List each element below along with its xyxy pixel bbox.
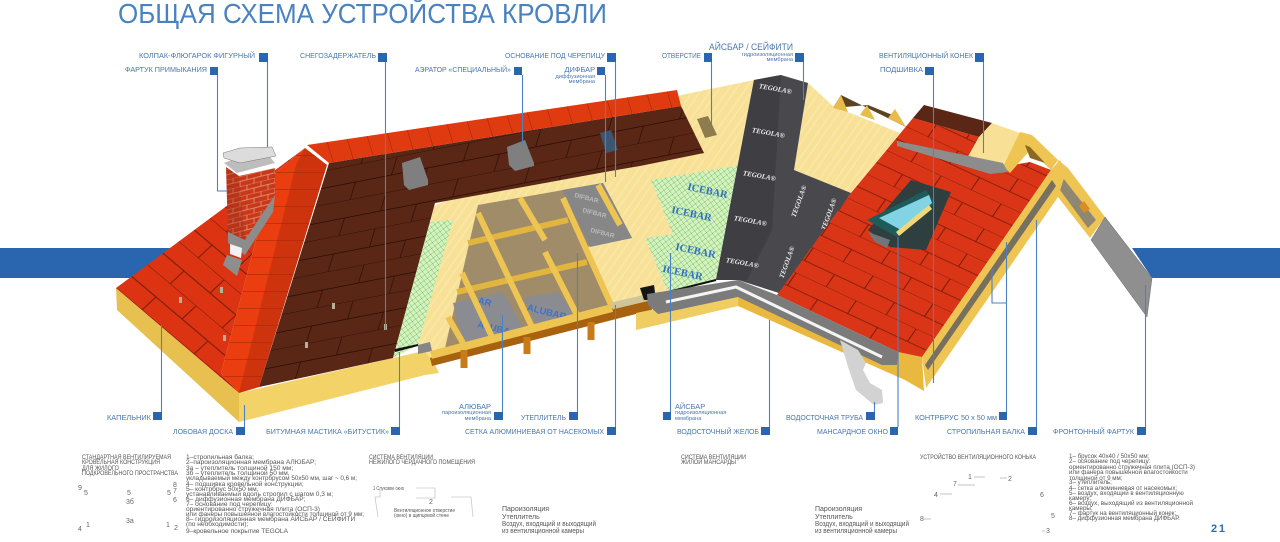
ridge diagram numbers: 5 — [1051, 513, 1055, 520]
list: ridge layers: 8– диффузионная мембрана ДИФБАР. — [1069, 515, 1180, 522]
dark membrane: TEGOLA® — [742, 169, 777, 183]
diagram numbers 1: 5 — [84, 490, 88, 497]
diagram numbers 1: 5 — [127, 490, 131, 497]
ridge diagram numbers — [920, 474, 1055, 535]
label: фронтонный фартук — [1053, 285, 1146, 436]
label: подшивка: ПОДШИВКА — [880, 65, 923, 74]
legend 2: Пароизоляция — [815, 506, 862, 513]
label: капельник: КАПЕЛЬНИК — [107, 413, 152, 422]
label: мансардное окно: МАНСАРДНОЕ ОКНО — [817, 427, 888, 436]
label: аэратор — [415, 65, 522, 145]
label: отверстие — [662, 51, 712, 127]
legend 2: Воздух, входящий и выходящий — [815, 520, 909, 528]
label: колпак — [139, 51, 268, 147]
rafter opening — [445, 183, 632, 348]
legend 1: Воздух, входящий и выходящий — [502, 520, 596, 528]
attic diagram: 2 — [429, 499, 433, 506]
diagram numbers 1: 1 — [86, 522, 90, 529]
label: стропильная балка — [947, 220, 1037, 436]
list: structure layers: 3б – утеплитель толщиной 50 мм, — [186, 469, 290, 477]
list: ridge layers: или фанера повышенной влагостойкости — [1069, 469, 1188, 476]
ridge diagram numbers: 3 — [1046, 528, 1050, 535]
label: контрбрус: КОНТРБРУС 50 x 50 мм — [915, 413, 997, 422]
label: айсбар: мембрана — [675, 416, 702, 422]
label: вентиляционный конек: ВЕНТИЛЯЦИОННЫЙ КОНЕК — [879, 51, 974, 60]
list: structure layers: укладываемый между контрбрусом 50х50 мм, шаг ~ 0,6 м; — [186, 474, 357, 482]
diagram numbers 1: 5 — [167, 490, 171, 497]
label: основание: ОСНОВАНИЕ ПОД ЧЕРЕПИЦУ — [505, 51, 605, 60]
alubar membrane: ALUBA — [476, 319, 511, 338]
list: structure layers: 6– диффузионная мембрана ДИФБАР; — [186, 495, 305, 503]
ridge diagram numbers: 1 — [968, 474, 972, 481]
label: дифбар — [556, 65, 606, 182]
label: снегозадержатель: СНЕГОЗАДЕРЖАТЕЛЬ — [300, 51, 376, 60]
red roof right — [777, 118, 1051, 357]
legend 1: Утеплитель — [502, 514, 540, 521]
difbar membrane — [562, 183, 632, 247]
difbar membrane: DIFBAR — [574, 192, 599, 205]
list: ridge layers: 3– утеплитель; — [1069, 479, 1112, 486]
frontal apron — [1091, 217, 1152, 317]
list: structure layers: устанавливаемый вдоль стропил с шагом 0,3 м; — [186, 490, 333, 498]
label: дифбар: мембрана — [569, 79, 596, 85]
blue band left — [0, 248, 180, 278]
list: structure layers: (по необходимости); — [186, 520, 248, 528]
brown ridge patch — [913, 105, 992, 137]
mesh icebar: ICEBAR — [661, 264, 704, 283]
label: алюбар: пароизоляционная — [442, 410, 491, 416]
osb near ridge — [965, 123, 1020, 163]
osb left main deck — [418, 80, 754, 357]
label: дифбар: диффузионная — [556, 74, 595, 80]
rafters — [431, 185, 650, 368]
legend 2: Утеплитель — [815, 514, 853, 521]
ridge diagram numbers: 2 — [1008, 476, 1012, 483]
legend 1: из вентиляционной камеры — [502, 527, 584, 535]
difbar membrane: DIFBAR — [582, 207, 607, 220]
lower board under gutter — [636, 292, 738, 330]
list: structure layers: 1–стропильная балка; — [186, 453, 254, 461]
attic diagram: (окно) в щипцовой стене — [394, 512, 449, 519]
dark membrane: TEGOLA® — [778, 245, 797, 279]
dark membrane — [716, 75, 851, 293]
caption: cold attic ventilation — [369, 454, 475, 466]
gable truss right — [1054, 160, 1105, 238]
small trusses — [833, 95, 906, 127]
verge — [922, 160, 1066, 388]
label: айсбар сейфити — [709, 41, 804, 100]
aerator special — [600, 130, 618, 153]
ridge diagram numbers: 4 — [934, 492, 938, 499]
legend 2: из вентиляционной камеры — [815, 527, 897, 535]
mesh left — [393, 220, 453, 358]
legend 1: Пароизоляция — [502, 506, 549, 513]
ridge diagram numbers: 7 — [953, 481, 957, 488]
label: основание — [505, 51, 616, 177]
list: ridge layers: 6– воздух, выходящий из вентиляционной — [1069, 500, 1194, 507]
list: structure layers: 4– подшивка кровельной конструкции; — [186, 480, 304, 488]
diagram numbers 1: 9 — [78, 485, 82, 492]
diagram numbers 1: 2 — [174, 525, 178, 532]
caption: attic room ventilation: ЖИЛОЙ МАНСАРДЫ — [681, 457, 736, 466]
label: контрбрус — [915, 242, 1007, 422]
roof window — [867, 180, 951, 250]
osb upper right — [794, 83, 900, 193]
caption: cold attic ventilation: СИСТЕМА ВЕНТИЛЯЦИИ — [369, 454, 433, 461]
alubar membrane: ALUBAR — [526, 302, 568, 323]
hip roof red — [116, 148, 305, 393]
mesh icebar: ICEBAR — [674, 242, 717, 261]
list: structure layers: 5– контрбрус 50х50 мм, — [186, 485, 259, 493]
caption: ridge ventilation: УСТРОЙСТВО ВЕНТИЛЯЦИОННОГО КОНЬКА — [920, 452, 1036, 461]
label: айсбар сейфити: АЙСБАР / СЕЙФИТИ — [709, 41, 793, 52]
caption: cold attic ventilation: НЕЖИЛОГО ЧЕРДАЧНОГО ПОМЕЩЕНИЯ — [369, 459, 475, 466]
label: айсбар сейфити: гидроизоляционная — [742, 52, 793, 58]
list: ridge layers: 7– фартук на вентиляционный конек; — [1069, 510, 1176, 517]
label: колпак: КОЛПАК-ФЛЮГАРОК ФИГУРНЫЙ — [139, 51, 255, 60]
dark membrane: TEGOLA® — [733, 214, 768, 228]
diagram numbers 1: 3а — [126, 518, 134, 525]
caption: attic room ventilation — [681, 454, 746, 466]
label: водосточная труба: ВОДОСТОЧНАЯ ТРУБА — [786, 413, 863, 422]
mesh icebar — [645, 165, 742, 292]
attic diagram: 1 Слуховое окно — [373, 486, 404, 492]
list: ridge layers: 4– сетка алюминиевая от насекомых; — [1069, 485, 1177, 492]
label: айсбар: гидроизоляционная — [675, 410, 726, 416]
label: фронтонный фартук: ФРОНТОННЫЙ ФАРТУК — [1053, 427, 1135, 436]
list: structure layers: 9–кровельное покрытие TEGOLA — [186, 528, 289, 535]
diagram numbers 1 — [78, 482, 178, 533]
aerator 2 — [507, 140, 534, 171]
label: утеплитель — [521, 253, 578, 422]
diagram numbers 1: 3б — [126, 498, 134, 506]
diagram numbers 1: 6 — [173, 497, 177, 504]
list: structure layers: 3а – утеплитель толщиной 150 мм; — [186, 464, 293, 472]
label: айсбар: АЙСБАР — [675, 402, 705, 411]
list: ridge layers: 5– воздух, входящий в вентиляционную — [1069, 490, 1184, 497]
caption: standard ventilated structure — [82, 454, 178, 477]
dark membrane: TEGOLA® — [790, 184, 809, 218]
caption: attic room ventilation: СИСТЕМА ВЕНТИЛЯЦИИ — [681, 454, 746, 461]
legend 2 — [815, 506, 909, 535]
label: алюбар: АЛЮБАР — [459, 402, 491, 411]
list: structure layers: 2–пароизоляционная мембрана АЛЮБАР; — [186, 458, 316, 466]
label: капельник — [107, 325, 162, 422]
list: ridge layers — [1069, 453, 1195, 522]
label: айсбар — [663, 253, 726, 422]
label: водосточный желоб: ВОДОСТОЧНЫЙ ЖЕЛОБ — [677, 427, 759, 436]
dark membrane: TEGOLA® — [820, 197, 839, 231]
list: structure layers — [186, 453, 364, 535]
list: ridge layers: камеру; — [1069, 495, 1091, 502]
eave board right — [738, 296, 924, 391]
vent slot — [697, 116, 717, 138]
legend 1 — [502, 506, 596, 535]
ridge diagram numbers: 8 — [920, 516, 924, 523]
ridge tiles — [307, 90, 681, 163]
snow guards — [179, 287, 387, 348]
hip tile band — [221, 148, 327, 393]
label: водосточная труба — [786, 402, 875, 422]
list: ridge layers: 1– брусок 40х40 / 50х50 мм; — [1069, 453, 1150, 460]
caption: standard ventilated structure: ПОДКРОВЕЛЬНОГО ПРОСТРАНСТВА — [82, 470, 178, 477]
dark membrane: TEGOLA® — [751, 126, 786, 140]
label: водосточный желоб — [677, 320, 770, 436]
blue band right — [1132, 248, 1280, 278]
label: вентиляционный конек — [879, 51, 984, 153]
ridge truss — [1003, 132, 1058, 173]
label: битумная мастика: БИТУМНАЯ МАСТИКА «БИТУСТИК» — [266, 427, 389, 436]
caption: standard ventilated structure: КРОВЕЛЬНАЯ КОНСТРУКЦИЯ — [82, 459, 160, 466]
label: алюбар — [442, 315, 503, 422]
difbar membrane: DIFBAR — [590, 227, 615, 240]
caption: standard ventilated structure: ДЛЯ ЖИЛОГО — [82, 465, 119, 472]
attic diagram: Вентиляционное отверстие — [394, 508, 455, 514]
diagram numbers 1: 8 — [173, 482, 177, 489]
caption: standard ventilated structure: СТАНДАРТНАЯ ВЕНТИЛИРУЕМАЯ — [82, 454, 171, 461]
label: битумная мастика — [266, 352, 400, 436]
list: ridge layers: толщиной от 9 мм; — [1069, 475, 1123, 482]
label: утеплитель: УТЕПЛИТЕЛЬ — [521, 413, 566, 422]
alubar membrane — [453, 292, 577, 343]
diagram numbers 1: 1 — [166, 522, 170, 529]
label: фартук — [125, 65, 227, 191]
chimney — [223, 147, 276, 276]
brown roof field — [259, 106, 704, 387]
label: алюбар: мембрана — [465, 416, 492, 422]
label: лобовая доска — [173, 405, 245, 436]
label: аэратор: АЭРАТОР «СПЕЦИАЛЬНЫЙ» — [415, 65, 511, 74]
aerator 1 — [402, 157, 428, 190]
alubar membrane: AR — [477, 296, 493, 310]
label: сетка — [465, 305, 616, 436]
label: айсбар сейфити: мембрана — [767, 57, 794, 63]
eave fascia front — [239, 350, 439, 422]
bitumen mastic strip — [395, 342, 432, 354]
downpipe — [840, 340, 883, 405]
label: отверстие: ОТВЕРСТИЕ — [662, 51, 701, 60]
list: structure layers: 7– основание под черепицу: — [186, 501, 273, 508]
label: подшивка — [880, 65, 934, 383]
list: structure layers: или фанеры повышенной влагостойкости толщиной от 9 мм; — [186, 510, 364, 518]
small truss gap — [833, 95, 906, 127]
label: фартук: ФАРТУК ПРИМЫКАНИЯ — [125, 65, 207, 74]
list: structure layers: 8– гидроизоляционная мембрана АЙСБАР / СЕЙФИТИ — [186, 514, 355, 523]
list: ridge layers: ориентированно стружечная плита (ОСП-3) — [1069, 464, 1195, 471]
dark membrane: TEGOLA® — [725, 256, 760, 270]
ridge diagram numbers: 6 — [1040, 492, 1044, 499]
label: стропильная балка: СТРОПИЛЬНАЯ БАЛКА — [947, 427, 1025, 436]
list: structure layers: ориентированно стружечная плита (ОСП-3) — [186, 506, 320, 513]
attic diagram — [373, 486, 473, 519]
list: ridge layers: камеры; — [1069, 505, 1093, 512]
mesh icebar: ICEBAR — [686, 182, 729, 201]
diagram numbers 1: 7 — [173, 488, 177, 495]
label: снегозадержатель — [300, 51, 387, 330]
label: мансардное окно — [817, 237, 898, 436]
wood beam under opening — [430, 298, 652, 366]
vent ridge flashing — [897, 141, 1008, 174]
label: сетка: СЕТКА АЛЮМИНИЕВАЯ ОТ НАСЕКОМЫХ — [465, 427, 604, 436]
roof illustration — [116, 75, 1152, 422]
page number: 21 — [1211, 523, 1225, 535]
diagram numbers 1: 4 — [78, 526, 82, 533]
mesh icebar: ICEBAR — [670, 205, 713, 224]
gutter — [640, 280, 898, 365]
eave fascia left — [116, 288, 239, 422]
dark membrane: TEGOLA® — [758, 82, 793, 96]
list: ridge layers: 2– основание под черепицу: — [1069, 458, 1151, 465]
label: лобовая доска: ЛОБОВАЯ ДОСКА — [173, 427, 233, 436]
label: дифбар: ДИФБАР — [565, 65, 595, 74]
